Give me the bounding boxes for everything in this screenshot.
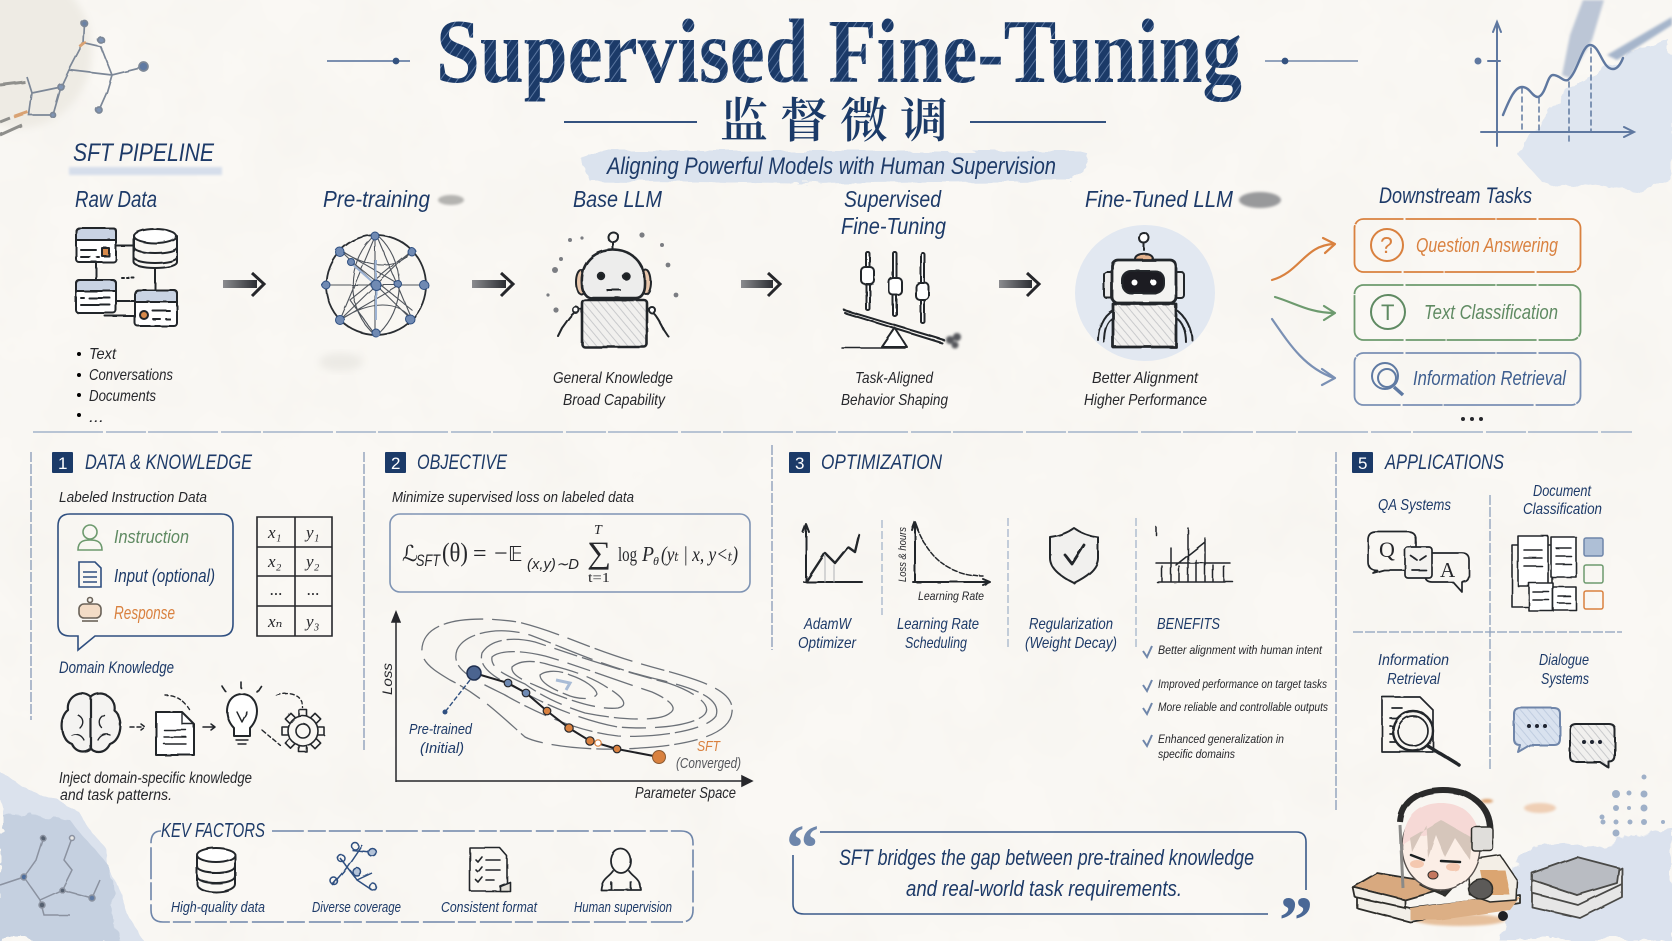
icon: data sources xyxy=(76,228,177,326)
data table: y₃ xyxy=(304,612,320,631)
chart labels: Loss xyxy=(379,663,395,695)
app: document classification: Document xyxy=(1533,483,1591,500)
method: regularization: Regularization xyxy=(1029,616,1113,633)
data type list xyxy=(77,346,173,426)
quote callout: SFT bridges the gap between pre-trained knowledge xyxy=(839,845,1254,870)
method: regularization xyxy=(1025,528,1117,652)
app: information retrieval: Information xyxy=(1378,652,1449,669)
column rules xyxy=(882,518,1136,650)
data type list: Documents xyxy=(89,388,156,405)
app: dialogue systems xyxy=(1514,652,1615,768)
section heading: DATA & KNOWLEDGE xyxy=(85,451,253,474)
section heading xyxy=(52,451,253,474)
method: learning rate: Learning Rate xyxy=(897,616,979,633)
app: dialogue systems: Dialogue xyxy=(1539,652,1589,669)
pipeline: fine-tuned LLM: Fine-Tuned LLM xyxy=(1085,186,1234,212)
method: learning rate: Scheduling xyxy=(905,635,967,652)
benefit items: specific domains xyxy=(1158,747,1235,761)
molecule decoration: top left xyxy=(0,20,148,135)
mascot: girl sleeping on books xyxy=(1353,790,1622,926)
benefit items: Enhanced generalization in xyxy=(1158,732,1284,746)
pipeline: fine-tuned LLM xyxy=(1075,186,1281,409)
task: information retrieval: Information Retrieval xyxy=(1413,368,1566,390)
data table: y₁ xyxy=(304,523,319,542)
data type list: Text xyxy=(89,346,116,363)
chart axes xyxy=(392,612,752,786)
section heading: 5 xyxy=(1358,454,1367,473)
formula box: = xyxy=(473,541,487,567)
formula box xyxy=(390,514,750,592)
caption xyxy=(841,370,948,409)
factor: diversity xyxy=(312,842,401,916)
pipeline: raw data: Raw Data xyxy=(75,186,157,212)
method: learning rate: Learning Rate xyxy=(918,589,984,603)
panel dividers xyxy=(31,445,1336,810)
section heading: 1 xyxy=(58,454,67,473)
arrow: to text classification xyxy=(1275,297,1335,320)
section heading xyxy=(1352,451,1504,474)
paint stains xyxy=(1415,799,1556,926)
icon: base robot xyxy=(558,232,668,347)
headphones xyxy=(1400,790,1493,851)
app: QA systems: QA Systems xyxy=(1378,497,1451,514)
formula box: ℒ xyxy=(402,542,418,567)
title: Supervised Fine-Tuning xyxy=(436,1,1242,102)
benefit items xyxy=(1143,643,1328,761)
pipeline: pre-training: Pre-training xyxy=(323,186,430,212)
speech bubble: instruction fields: Instruction xyxy=(114,527,189,547)
pipeline: base LLM xyxy=(546,186,678,409)
data table: ... xyxy=(307,580,320,599)
formula box: T xyxy=(594,523,603,538)
app: QA systems: A xyxy=(1440,558,1456,582)
books on the side xyxy=(1532,857,1622,918)
factor: consistency xyxy=(441,848,538,916)
arrow: supervised fine-tuning to fine-tuned LLM xyxy=(999,273,1039,296)
quote callout: and real-world task requirements. xyxy=(906,876,1182,901)
arrow: raw data to pre-training xyxy=(223,273,264,296)
benefit items: More reliable and controllable outputs xyxy=(1158,700,1328,714)
icon: brain to gear flow xyxy=(62,682,324,755)
app: information retrieval: Retrieval xyxy=(1387,671,1440,688)
pipeline: base LLM: Base LLM xyxy=(573,186,663,212)
ink dot xyxy=(1498,911,1508,921)
caption: Task-Aligned xyxy=(855,370,934,387)
factor: data quality: High-quality data xyxy=(171,900,265,916)
formula box: (x,y)∼D xyxy=(527,556,579,573)
data table: x₁ xyxy=(267,523,281,542)
specks around robot xyxy=(546,232,678,313)
section heading: OBJECTIVE xyxy=(417,451,508,474)
app: dialogue systems: Systems xyxy=(1541,671,1589,688)
task: question answering: ? xyxy=(1380,232,1393,258)
icon: network globe xyxy=(322,232,428,337)
method: learning rate: Loss & hours xyxy=(897,527,909,582)
section heading: 2 xyxy=(391,454,400,473)
subtitle band: Aligning Powerful Models with Human Supervision xyxy=(605,153,1056,180)
formula box: 𝔼 xyxy=(508,542,523,566)
panel 5: applications xyxy=(1352,451,1622,770)
app: document classification xyxy=(1512,483,1603,611)
caption xyxy=(553,370,673,409)
panel: key factors: KEV FACTORS xyxy=(161,820,265,842)
formula box: log xyxy=(618,544,637,566)
factor: human supervision: Human supervision xyxy=(574,900,672,916)
chart: loss landscape: (Initial) xyxy=(420,740,464,757)
panel 2: objective xyxy=(379,451,752,802)
quote callout xyxy=(786,812,1313,941)
caption: and task patterns. xyxy=(60,787,172,804)
icon: benefits chart xyxy=(1156,527,1233,582)
app: document classification: Classification xyxy=(1523,501,1602,518)
chart: loss landscape: (Converged) xyxy=(676,755,741,772)
speech bubble: instruction fields: Response xyxy=(114,603,175,623)
contour lines xyxy=(422,619,732,749)
app: QA systems xyxy=(1368,497,1469,592)
benefit items: Improved performance on target tasks xyxy=(1158,677,1327,691)
data table: y₂ xyxy=(304,552,320,571)
data table: x₂ xyxy=(267,552,282,571)
pipeline heading: SFT PIPELINE xyxy=(73,139,214,167)
task: question answering xyxy=(1354,219,1580,272)
subheading: Minimize supervised loss on labeled data xyxy=(392,489,634,506)
smudge xyxy=(946,333,961,348)
icon: person xyxy=(78,525,102,550)
formula box: (θ) xyxy=(442,538,468,567)
data table: xₙ xyxy=(267,612,283,631)
benefit items: Better alignment with human intent xyxy=(1158,643,1323,657)
section divider xyxy=(33,431,1632,433)
optimization path xyxy=(442,666,666,764)
icon: document xyxy=(79,562,101,587)
caption xyxy=(59,770,252,804)
method: regularization: (Weight Decay) xyxy=(1025,635,1117,652)
molecule decoration: bottom left xyxy=(0,836,100,915)
section heading: OPTIMIZATION xyxy=(821,451,943,474)
caption: Behavior Shaping xyxy=(841,392,948,409)
icon: robot xyxy=(79,598,101,621)
formula box: t=1 xyxy=(588,571,610,586)
grid rules xyxy=(1353,495,1622,770)
data type list: Conversations xyxy=(89,367,173,384)
chart: loss landscape: SFT xyxy=(697,738,721,755)
data table xyxy=(257,517,332,636)
arrow: base LLM to supervised fine-tuning xyxy=(741,273,780,296)
data table: ... xyxy=(270,580,283,599)
icon: sliders and balance xyxy=(842,252,944,348)
chart: loss landscape: Pre-trained xyxy=(409,721,473,738)
pipeline: supervised fine-tuning: Supervised xyxy=(844,186,942,212)
speech bubble: instruction fields xyxy=(58,514,233,650)
panel 1: data and knowledge xyxy=(52,451,332,804)
formula box: ∑ xyxy=(587,535,611,570)
caption: Higher Performance xyxy=(1084,392,1207,409)
title side rules xyxy=(327,58,1358,122)
chart decoration: top right xyxy=(1476,22,1634,146)
more tasks dots xyxy=(1461,417,1483,421)
factor: human supervision xyxy=(574,849,672,916)
benefits: BENEFITS xyxy=(1157,616,1220,633)
factor: diversity: Diverse coverage xyxy=(312,900,401,916)
task: text classification: Text Classification xyxy=(1424,302,1558,324)
contour center smudge xyxy=(556,680,570,690)
arrow: to question answering xyxy=(1272,238,1335,280)
formula box: − xyxy=(494,541,508,567)
caption: Better Alignment xyxy=(1092,370,1198,387)
section heading: 3 xyxy=(795,454,804,473)
chinese title: 监督微调 xyxy=(720,95,960,148)
panel 3: optimization xyxy=(789,451,1328,761)
method: adamw: Optimizer xyxy=(798,635,857,652)
factor: data quality xyxy=(171,848,265,916)
pipeline: raw data xyxy=(75,186,177,426)
formula box: SFT xyxy=(416,551,441,570)
chart: loss landscape xyxy=(379,612,752,802)
task: information retrieval xyxy=(1354,353,1580,405)
smudge xyxy=(438,195,464,205)
quote callout: “ xyxy=(786,812,819,885)
section heading: APPLICATIONS xyxy=(1383,451,1504,474)
caption: Inject domain-specific knowledge xyxy=(59,770,252,787)
panel: key factors xyxy=(151,820,693,922)
formula box: P xyxy=(641,542,654,566)
method: adamw xyxy=(798,524,862,652)
formula box: (yₜ | x, y<ₜ) xyxy=(661,542,738,566)
section heading xyxy=(789,451,943,474)
jacket and hand xyxy=(1420,855,1517,902)
books under the mascot xyxy=(1353,873,1520,922)
chart: loss landscape: Parameter Space xyxy=(635,785,736,802)
task: question answering: Question Answering xyxy=(1416,235,1558,257)
pipeline: supervised fine-tuning xyxy=(841,186,961,409)
app: information retrieval xyxy=(1378,652,1459,765)
section heading xyxy=(385,451,508,474)
pipeline heading xyxy=(69,139,222,175)
subheading: Domain Knowledge xyxy=(59,658,174,677)
app: QA systems: Q xyxy=(1379,537,1395,562)
arrow: to information retrieval xyxy=(1272,319,1335,385)
panel: downstream tasks: Downstream Tasks xyxy=(1379,183,1532,208)
subheading: Labeled Instruction Data xyxy=(59,489,207,506)
caption: General Knowledge xyxy=(553,370,673,387)
pipeline: pre-training xyxy=(322,186,464,337)
pipeline: supervised fine-tuning: Fine-Tuning xyxy=(841,213,946,239)
icon: tuned robot xyxy=(1075,225,1215,361)
decorative dots xyxy=(1600,774,1665,836)
task: text classification xyxy=(1354,285,1580,340)
factor: consistency: Consistent format xyxy=(441,900,538,916)
speech bubble: instruction fields: Input (optional) xyxy=(114,566,215,586)
method: adamw: AdamW xyxy=(803,616,853,633)
panel: downstream tasks xyxy=(1272,183,1580,421)
data type list: ... xyxy=(89,409,104,426)
formula box: θ xyxy=(653,554,659,568)
caption: Broad Capability xyxy=(563,392,666,409)
caption xyxy=(1084,370,1207,409)
benefits xyxy=(1143,527,1328,761)
task: text classification: T xyxy=(1381,300,1394,325)
head xyxy=(1400,803,1480,890)
method: learning rate xyxy=(897,522,990,652)
arrow: pre-training to base LLM xyxy=(472,273,513,296)
